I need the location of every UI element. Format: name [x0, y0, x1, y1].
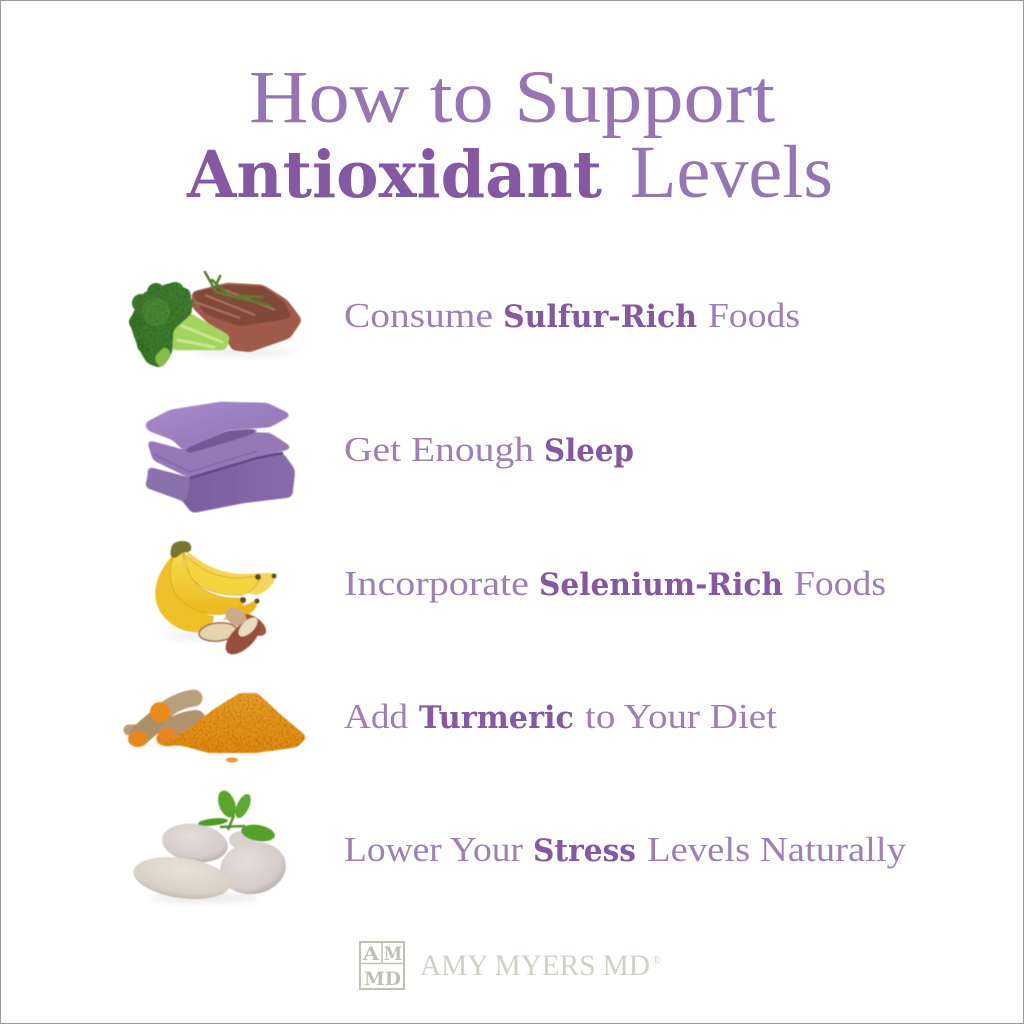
- text: get enough sleep: [344, 430, 634, 469]
- text: add turmeric to your diet: Turmeric: [419, 700, 574, 736]
- icon: turmeric roots and powder: [128, 693, 307, 762]
- text: add turmeric to your diet: Add: [344, 697, 409, 736]
- logo mark: [360, 942, 404, 990]
- text: lower your stress levels naturally: [344, 830, 907, 869]
- icon: broccoli and steak: [129, 272, 302, 369]
- text: consume sulfur-rich foods: Consume: [344, 296, 493, 335]
- logo mark: M: [384, 943, 402, 965]
- title: [186, 56, 833, 214]
- text: lower your stress levels naturally: Lower Your: [344, 830, 523, 869]
- logo wordmark: AMY MYERS MD: [420, 949, 650, 982]
- text: get enough sleep: Sleep: [544, 433, 634, 469]
- text: incorporate selenium-rich foods: [344, 564, 886, 603]
- text: incorporate selenium-rich foods: Foods: [794, 564, 886, 603]
- icon: stones with green leaves: [131, 788, 290, 905]
- logo mark: MD: [364, 968, 401, 990]
- text: add turmeric to your diet: to Your Diet: [585, 697, 777, 736]
- icon: bananas and brazil nuts: [155, 541, 276, 660]
- text: incorporate selenium-rich foods: Selenium-Rich: [539, 567, 783, 603]
- logo: Amy Myers MD: [360, 942, 661, 990]
- text: consume sulfur-rich foods: Foods: [708, 296, 800, 335]
- text: lower your stress levels naturally: Levels Naturally: [647, 830, 907, 869]
- text: add turmeric to your diet: [344, 697, 777, 736]
- text: consume sulfur-rich foods: [344, 296, 800, 335]
- logo wordmark: ®: [652, 953, 661, 967]
- title: Antioxidant: [186, 137, 602, 213]
- logo mark: A: [362, 943, 379, 965]
- icon: stacked purple bedding: [145, 402, 295, 513]
- text: incorporate selenium-rich foods: Incorporate: [344, 564, 529, 603]
- title: How to Support: [249, 56, 775, 139]
- text: consume sulfur-rich foods: Sulfur-Rich: [503, 299, 697, 335]
- title: Levels: [630, 131, 833, 214]
- text: lower your stress levels naturally: Stress: [533, 833, 636, 869]
- text: get enough sleep: Get Enough: [344, 430, 535, 469]
